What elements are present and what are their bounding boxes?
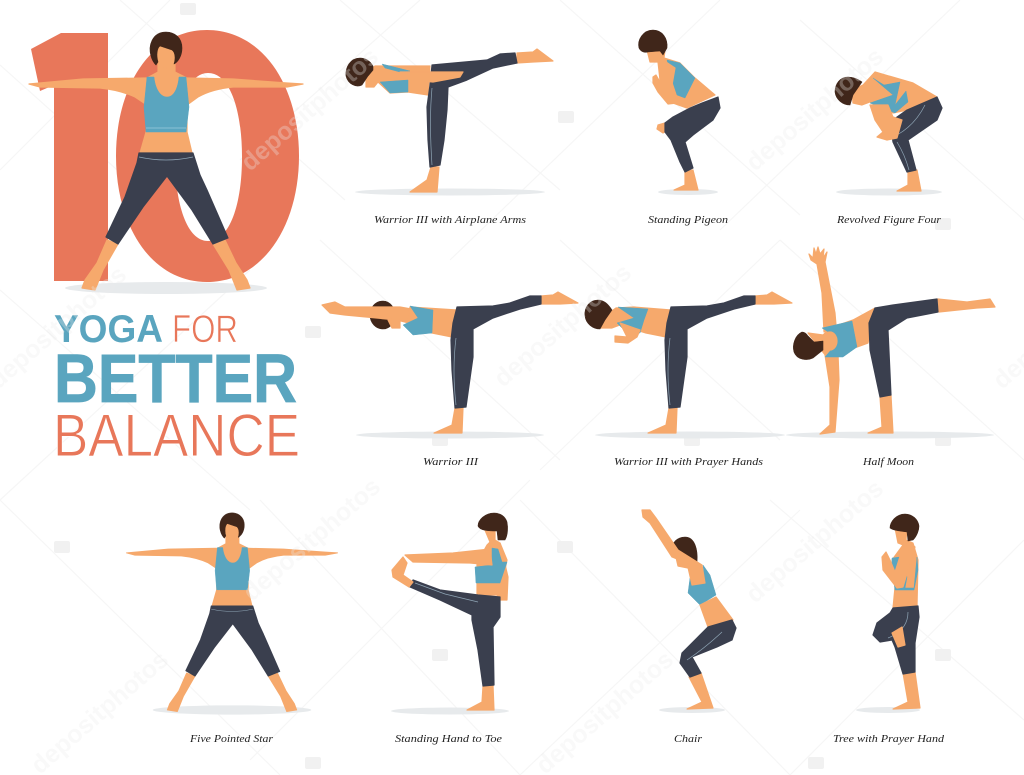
- pose: Revolved Figure Four: [835, 72, 942, 226]
- pose: Standing Hand to Toe: [391, 513, 509, 745]
- pose: Tree with Prayer Hand: [833, 514, 945, 745]
- caption: Standing Hand to Toe: [395, 733, 502, 745]
- caption: Standing Pigeon: [648, 214, 729, 226]
- big figure: five pointed star: [29, 32, 303, 294]
- caption: Five Pointed Star: [189, 733, 274, 745]
- title: YOGA FOR: FOR: [172, 308, 238, 351]
- pose: Chair: [642, 510, 736, 745]
- pose: Warrior III with Prayer Hands: [585, 292, 792, 468]
- watermark: depositphotos: [741, 474, 889, 609]
- pose: Warrior III with Airplane Arms: [346, 49, 553, 226]
- caption: Revolved Figure Four: [836, 214, 942, 226]
- title: YOGA FOR: [54, 308, 238, 351]
- pose: Warrior III: [322, 292, 578, 468]
- watermark: depositphotos: [741, 42, 889, 177]
- big number 10: [31, 30, 299, 282]
- pose: Five Pointed Star: [127, 513, 338, 745]
- caption: Warrior III: [423, 456, 480, 468]
- caption: Tree with Prayer Hand: [833, 733, 945, 745]
- title: BETTER: BETTER: [54, 340, 297, 417]
- title: BALANCE: BALANCE: [53, 402, 300, 469]
- watermark: depositphotos: [489, 258, 637, 393]
- title: YOGA FOR: YOGA: [54, 308, 163, 351]
- caption: Warrior III with Airplane Arms: [374, 214, 526, 226]
- title: [53, 308, 300, 469]
- pose: Standing Pigeon: [639, 30, 729, 226]
- watermark: depositphotos: [236, 42, 384, 177]
- pose: Half Moon: [786, 247, 995, 468]
- caption: Warrior III with Prayer Hands: [614, 456, 763, 468]
- caption: Half Moon: [862, 456, 915, 468]
- caption: Chair: [674, 733, 703, 745]
- watermark: depositphotos: [238, 472, 386, 607]
